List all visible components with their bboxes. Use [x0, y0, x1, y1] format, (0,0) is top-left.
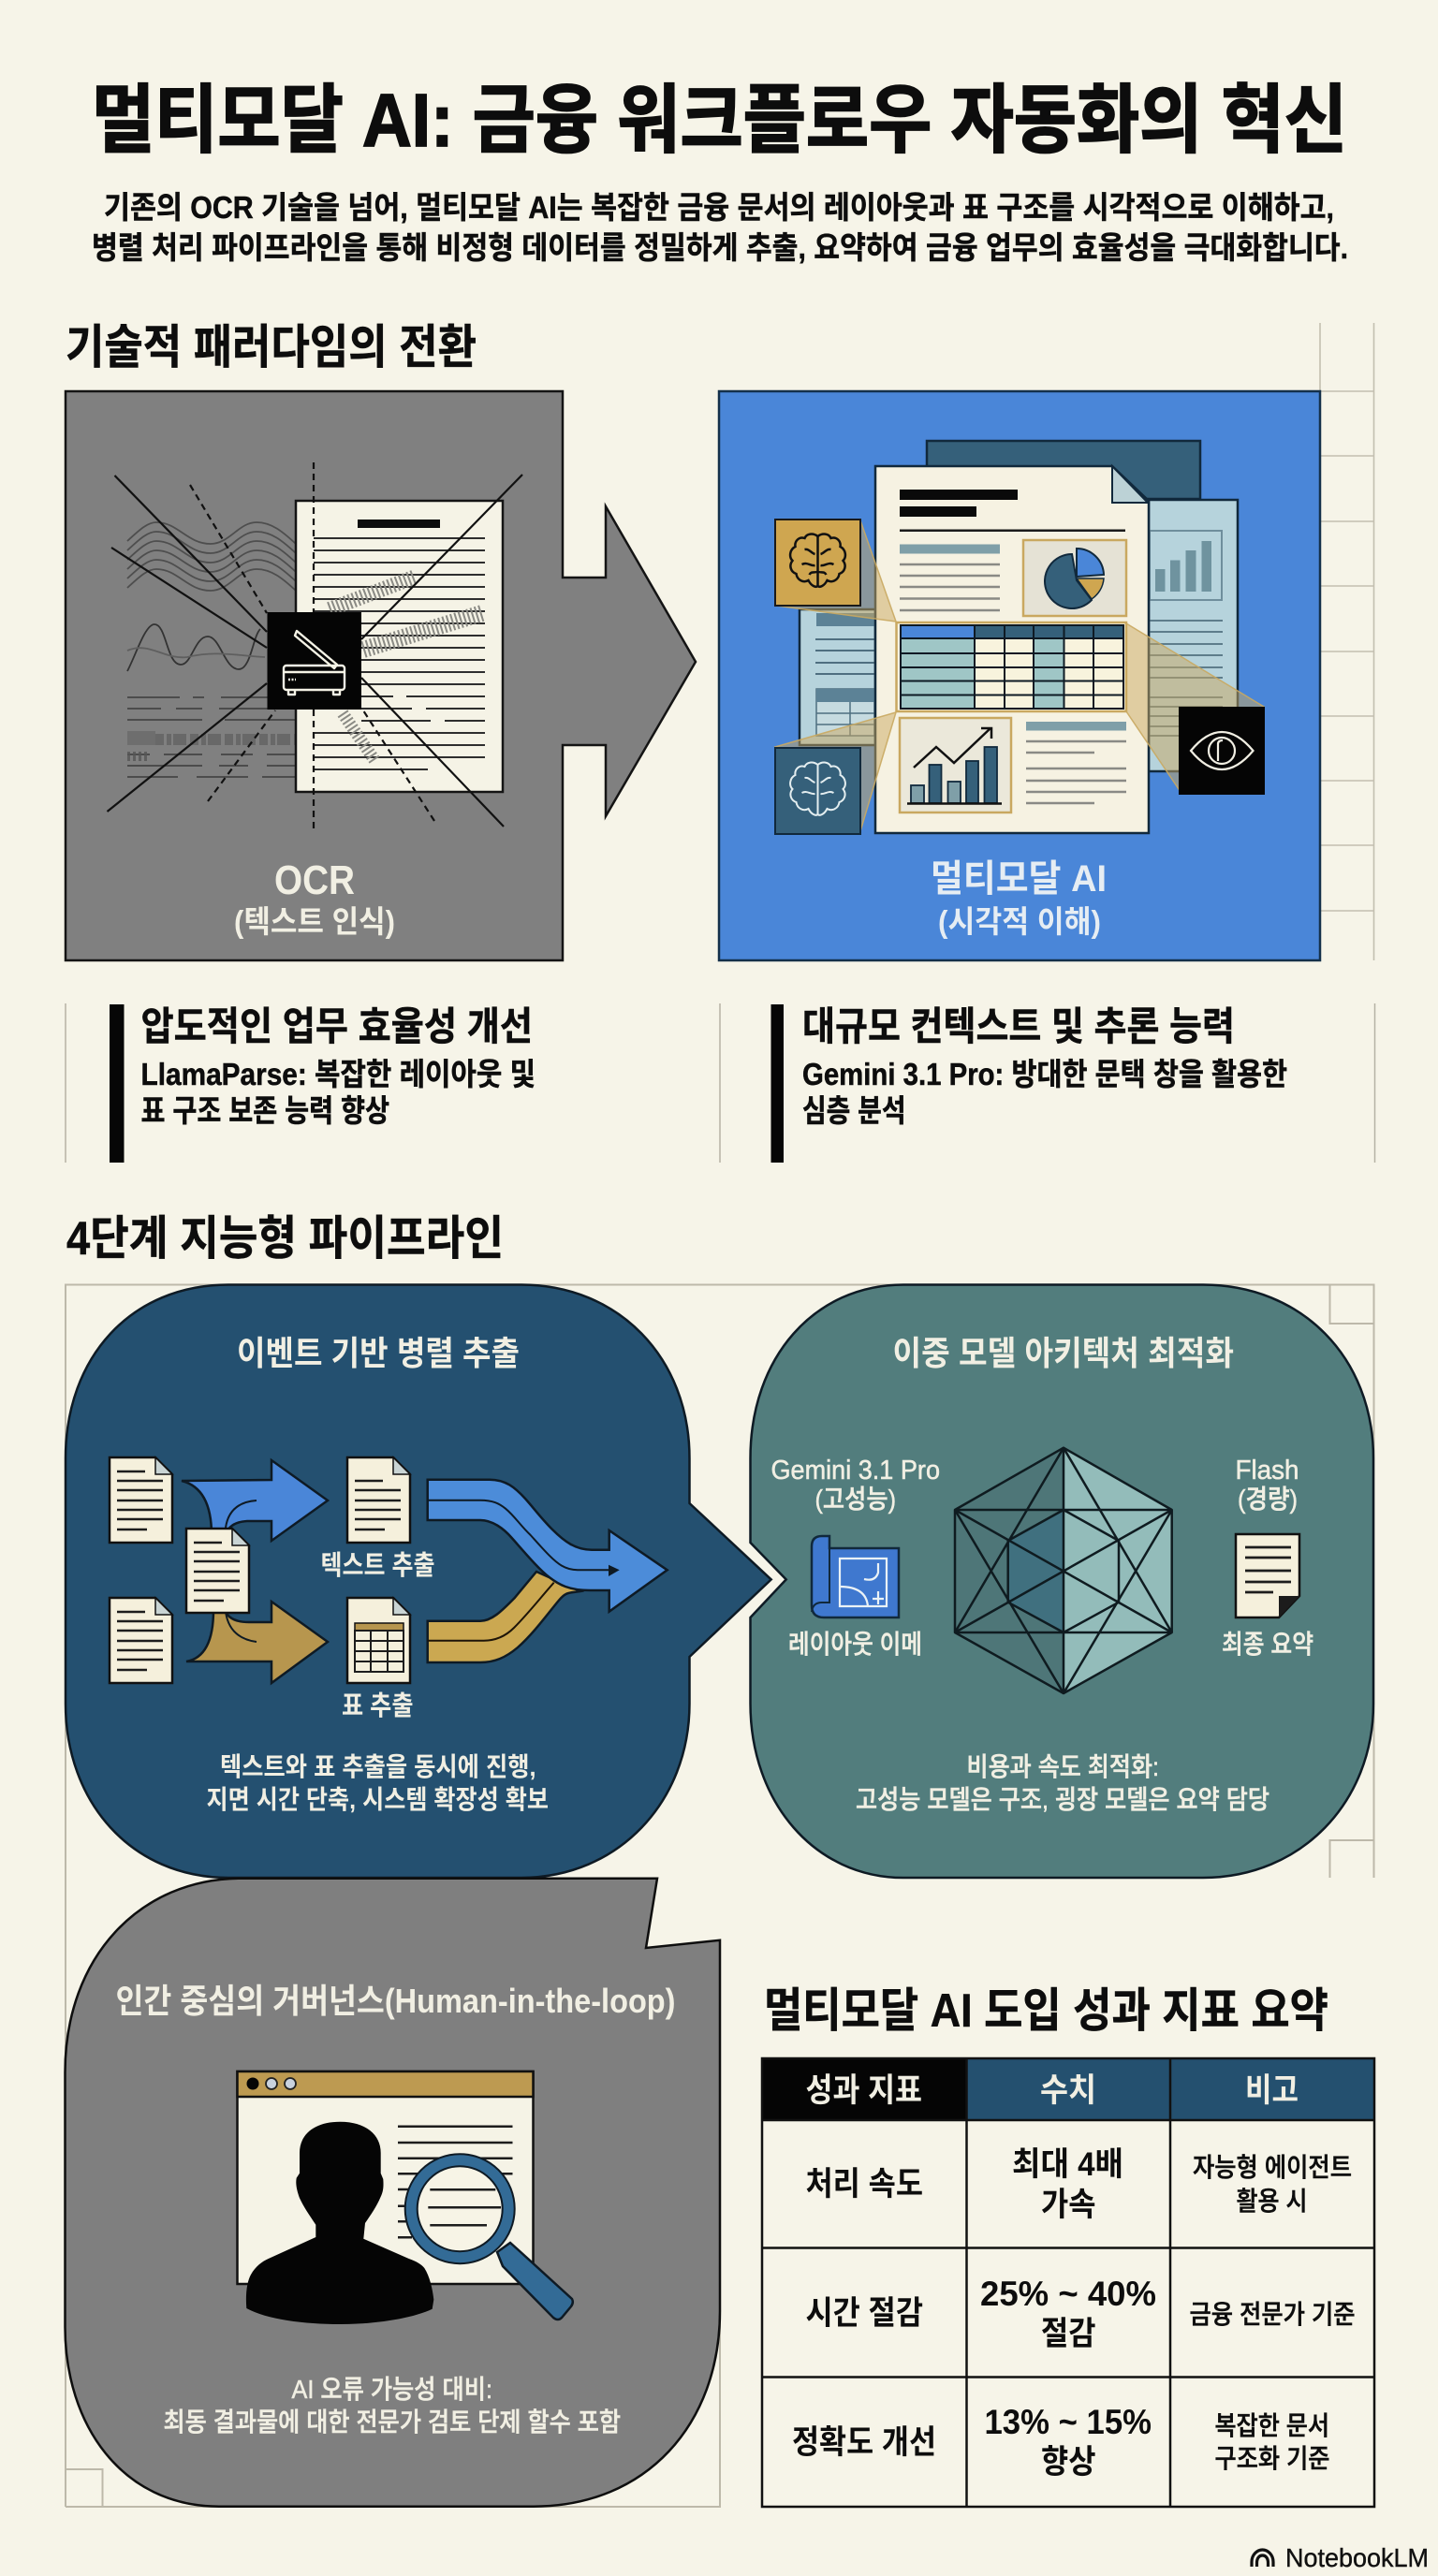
heading: paradigm shift: 기술적 패러다임의 전환	[66, 321, 477, 373]
model label: Gemini	[771, 1456, 940, 1514]
icon: scanner	[268, 612, 361, 710]
label: OCR: (텍스트 인식)	[234, 904, 395, 939]
main document	[875, 466, 1149, 833]
pie chart	[1023, 540, 1126, 616]
row: accuracy improvement: 향상	[1041, 2444, 1095, 2481]
ribbon: blue merge arrow	[428, 1480, 668, 1612]
panel description: 고성능 모델은 구조, 굉장 모델은 요약 담당	[856, 1785, 1269, 1814]
row: processing speed: 자능형 에이전트	[1193, 2153, 1352, 2182]
icon: icosahedron	[955, 1448, 1172, 1693]
document: input 1	[110, 1457, 172, 1543]
panel description: 최동 결과물에 대한 전문가 검토 단제 할수 포함	[163, 2408, 621, 2437]
panel: human in the loop	[66, 1879, 720, 2507]
icon: person silhouette	[246, 2122, 433, 2324]
speech-bubble navy background	[66, 1284, 771, 1878]
callout: large context: 심층 분석	[802, 1093, 906, 1128]
callout: large context: 대규모 컨텍스트 및 추론 능력	[802, 1004, 1235, 1048]
row: accuracy improvement	[792, 2403, 1329, 2481]
title: 멀티모달 AI: 금융 워크플로우 자동화의 혁신	[92, 79, 1347, 162]
speech-bubble teal background	[751, 1284, 1373, 1878]
decorative grid	[1320, 323, 1374, 960]
label: multimodal AI: 멀티모달 AI	[931, 858, 1107, 900]
blue panel background	[719, 391, 1320, 960]
browser window	[238, 2071, 534, 2284]
wavy noise lines	[127, 522, 296, 671]
document: input 3	[186, 1529, 249, 1613]
model label: Flash	[1236, 1456, 1299, 1514]
panel description	[163, 2375, 621, 2437]
label: layout understanding: 레이아웃 이메	[788, 1630, 922, 1659]
row: time saved: 절감	[1041, 2316, 1095, 2352]
table header: 비고	[1245, 2072, 1299, 2109]
panel: dual model architecture	[751, 1284, 1373, 1878]
callout: work efficiency: 표 구조 보존 능력 향상	[140, 1093, 389, 1128]
panel description: 지면 시간 단축, 시스템 확장성 확보	[206, 1785, 549, 1814]
table header: 성과 지표	[805, 2072, 922, 2109]
label: multimodal AI: (시각적 이해)	[938, 904, 1101, 939]
row: time saved: 시간 절감	[805, 2295, 923, 2332]
back document dark	[927, 441, 1200, 499]
scanned document	[296, 501, 503, 792]
faded table fragments	[127, 697, 296, 777]
callout: work efficiency	[66, 1003, 536, 1163]
label: multimodal AI	[931, 858, 1107, 939]
panel description: 비용과 속도 최적화:	[966, 1752, 1159, 1781]
panel description: AI 오류 가능성 대비:	[292, 2375, 492, 2404]
model label: Gemini: (고성능)	[814, 1485, 896, 1514]
label: text extraction: 텍스트 추출	[320, 1550, 434, 1581]
table: performance metrics	[762, 2058, 1374, 2507]
ribbon: gold merge	[428, 1572, 580, 1662]
panel title: 인간 중심의 거버넌스(Human-in-the-loop)	[116, 1982, 676, 2020]
icon: summary document	[1236, 1534, 1299, 1617]
panel title: 이중 모델 아키텍처 최적화	[893, 1334, 1234, 1372]
back document left	[800, 609, 875, 745]
label: OCR: OCR	[274, 857, 355, 903]
label: table extraction: 표 추출	[342, 1690, 414, 1721]
heading: pipeline: 4단계 지능형 파이프라인	[66, 1212, 504, 1265]
panel: multimodal AI	[719, 391, 1320, 960]
row: accuracy improvement: 13% ~ 15%	[985, 2403, 1152, 2441]
table header	[762, 2058, 1374, 2120]
row: processing speed: 처리 속도	[805, 2166, 923, 2203]
intro text	[92, 190, 1348, 265]
label: OCR	[234, 857, 395, 939]
row: processing speed	[805, 2146, 1352, 2223]
table grid	[762, 2058, 1374, 2507]
model label: Gemini: Gemini 3.1 Pro	[771, 1456, 940, 1486]
row: time saved: 금융 전문가 기준	[1189, 2300, 1356, 2329]
icon: gold brain	[775, 520, 860, 606]
row: accuracy improvement: 구조화 기준	[1215, 2444, 1329, 2473]
row: time saved: 25% ~ 40%	[980, 2275, 1156, 2313]
crossing lines	[107, 462, 522, 830]
back document right	[1149, 500, 1238, 771]
panel: event-based parallel extraction	[66, 1284, 771, 1878]
smudges on document	[330, 577, 482, 760]
callout: large context: Gemini 3.1 Pro: 방대한 문택 창을 활용한	[802, 1057, 1287, 1091]
callout: work efficiency: LlamaParse: 복잡한 레이아웃 및	[140, 1057, 536, 1091]
icon: blueprint	[812, 1536, 899, 1617]
panel description: 텍스트와 표 추출을 동시에 진행,	[220, 1752, 536, 1781]
data table	[897, 622, 1126, 711]
panel: OCR	[66, 391, 696, 960]
row: accuracy improvement: 복잡한 문서	[1215, 2411, 1329, 2440]
logo: NotebookLM: NotebookLM	[1285, 2543, 1429, 2572]
model label: Flash: Flash	[1236, 1456, 1299, 1486]
row: processing speed: 최대 4배	[1012, 2146, 1123, 2183]
gold focus beams	[775, 520, 1264, 831]
icon: magnifying glass	[411, 2160, 573, 2320]
panel description	[856, 1752, 1269, 1814]
heading: performance summary: 멀티모달 AI 도입 성과 지표 요약	[764, 1984, 1328, 2037]
panel description	[206, 1752, 549, 1814]
row: processing speed: 활용 시	[1236, 2187, 1307, 2216]
arrow: gold to table extraction	[186, 1602, 328, 1683]
table header: 수치	[1040, 2072, 1096, 2109]
callout: large context	[720, 1003, 1374, 1163]
document: input 2	[110, 1598, 172, 1683]
panel title: 이벤트 기반 병렬 추출	[237, 1334, 520, 1372]
icon: eye	[1179, 707, 1265, 795]
intro text: 병렬 처리 파이프라인을 통해 비정형 데이터를 정밀하게 추출, 요약하여 금융 업무의 효율성을 극대화합니다.	[92, 230, 1348, 265]
document: table extraction	[347, 1598, 410, 1683]
row: accuracy improvement: 정확도 개선	[792, 2424, 936, 2461]
icon: navy brain	[775, 748, 860, 834]
growth chart	[900, 718, 1011, 812]
row: time saved	[805, 2275, 1356, 2352]
arrow: blue to text extraction	[182, 1460, 328, 1541]
intro text: 기존의 OCR 기술을 넘어, 멀티모달 AI는 복잡한 금융 문서의 레이아웃과 표 구조를 시각적으로 이해하고,	[104, 190, 1334, 225]
callout: work efficiency: 압도적인 업무 효율성 개선	[140, 1004, 533, 1048]
model label: Flash: (경량)	[1238, 1485, 1298, 1514]
arrow-shaped OCR panel background	[66, 391, 696, 960]
label: final summary: 최종 요약	[1222, 1630, 1313, 1659]
row: processing speed: 가속	[1041, 2187, 1095, 2223]
speech-bubble gray background	[66, 1879, 720, 2507]
pipeline frame	[66, 1284, 1374, 2507]
document: text extraction	[347, 1457, 410, 1543]
